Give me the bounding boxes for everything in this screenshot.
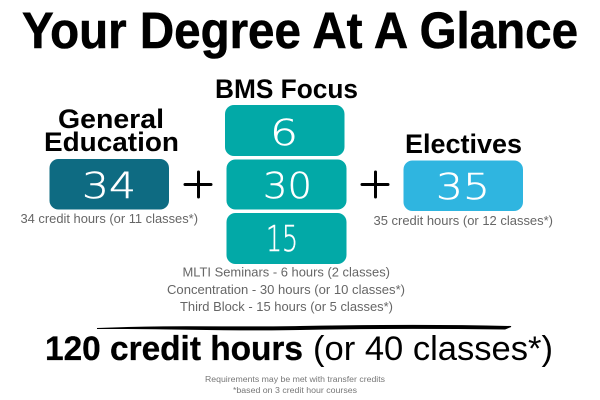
total credits: (or 40 classes*) bbox=[313, 330, 553, 368]
box: 15 credits bbox=[226, 213, 346, 264]
caption: BMS focus breakdown: Concentration - 30 hours (or 10 classes*) bbox=[167, 283, 405, 297]
footnote bbox=[205, 375, 385, 395]
heading: general education: General bbox=[58, 104, 164, 134]
caption: electives hours: 35 credit hours (or 12 classes*) bbox=[374, 214, 553, 228]
panel: electives bbox=[374, 129, 553, 228]
box: 34 credits: 34 bbox=[82, 166, 136, 207]
heading: electives: Electives bbox=[405, 129, 522, 159]
box: 35 credits: 35 bbox=[436, 167, 490, 208]
icon: plus bbox=[185, 172, 211, 197]
caption: general education hours: 34 credit hours (or 11 classes*) bbox=[20, 212, 198, 226]
icon: plus bbox=[362, 172, 388, 197]
heading: general education: Education bbox=[44, 127, 179, 157]
box: 30 credits: 30 bbox=[263, 166, 312, 207]
total credits: 120 credit hours bbox=[45, 330, 303, 368]
box: 6 credits bbox=[225, 105, 344, 156]
panel: BMS focus bbox=[167, 74, 405, 314]
total credits bbox=[45, 330, 553, 368]
caption: BMS focus breakdown: Third Block - 15 hours (or 5 classes*) bbox=[180, 300, 393, 314]
footnote: *based on 3 credit hour courses bbox=[233, 386, 357, 395]
box: 34 credits bbox=[50, 159, 169, 210]
divider: hand-drawn line bbox=[97, 325, 511, 330]
box: 15 credits: 15 bbox=[266, 219, 298, 260]
footnote: Requirements may be met with transfer credits bbox=[205, 375, 385, 384]
box: 35 credits bbox=[404, 160, 523, 211]
caption: BMS focus breakdown: MLTI Seminars - 6 hours (2 classes) bbox=[182, 266, 390, 280]
heading: BMS focus: BMS Focus bbox=[215, 74, 358, 104]
box: 30 credits bbox=[226, 160, 346, 210]
box: 6 credits: 6 bbox=[270, 113, 298, 154]
heading: general education bbox=[44, 104, 179, 157]
caption: BMS focus breakdown bbox=[167, 266, 405, 314]
panel: general education bbox=[20, 104, 198, 226]
